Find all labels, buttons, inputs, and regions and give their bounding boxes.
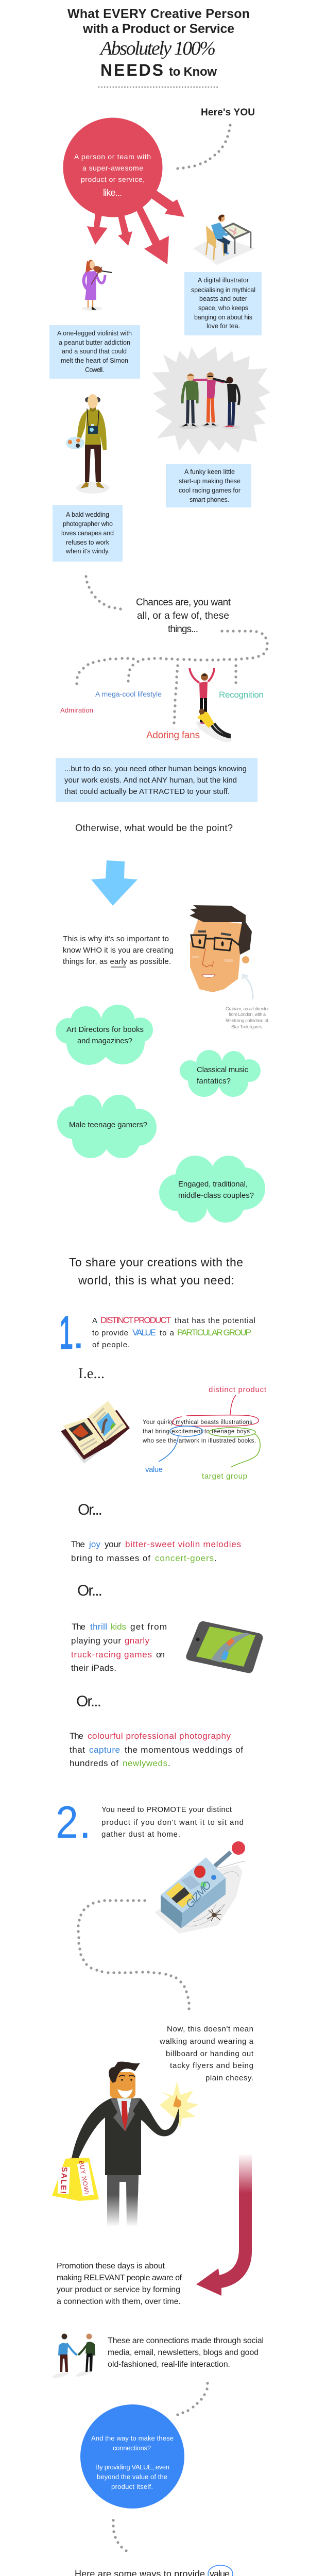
panel: illustrator caption: love for tea. [207,323,240,330]
text block: distinct product definition: that has the potential [175,1316,255,1325]
panel: photographer caption: loves canapes and [61,530,114,537]
caption: Graham: Star Trek figures. [231,1024,263,1029]
panel: start-up caption: smart phones. [190,496,229,503]
panel: blue circle: And the way to make these [91,2434,174,2442]
heading: ways to provide value [75,2565,233,2576]
cloud: classical music: Classical music [197,1065,248,1074]
text block: photography example: capture [89,1745,120,1755]
numeral: 1: . [72,1307,85,1358]
cloud: teenage gamers: Male teenage gamers? [69,1121,147,1129]
text block: connections: media, email, newsletters, blogs and good [108,2348,259,2357]
text block: violin example: . [214,1553,217,1563]
annotation: value [145,1426,203,1474]
text block: violin example [71,1539,241,1563]
heading: here's you: Here's YOU [201,107,255,118]
panel: red circle with arrows: product or service, [81,175,145,183]
title: to Know [169,65,217,79]
cloud: engaged couples: Engaged, traditional, [178,1180,248,1189]
icon: illustrator at desk [193,215,255,265]
text block: who it is for: things for, as early as possible. [63,957,171,966]
cloud: classical music [180,1050,261,1097]
numeral: 2: 2 [56,1797,78,1848]
panel: violinist caption: and a sound that could [62,348,127,355]
text block: photography example: the momentous weddings of [125,1745,243,1755]
text block: racing game example: gnarly [125,1636,149,1646]
title: NEEDS [100,61,163,79]
icon: cheesy salesman: BUY NOW! [78,2160,91,2195]
text block: photography example: hundreds of [70,1758,118,1768]
text block: distinct product definition [92,1315,255,1349]
text block: connections [108,2336,264,2369]
text block: distinct product definition: DISTINCT PRODUCT [100,1315,171,1325]
icon: wedding photographer [66,394,109,494]
text block: violin example: bitter-sweet violin melodies [125,1539,241,1549]
cloud: engaged couples [159,1156,265,1223]
text block: violin example: The [71,1539,85,1549]
text block: distinct product definition: to a [160,1329,175,1337]
text block: photography example: that [70,1745,85,1755]
text block: not cheesy: Now, this doesn't mean [167,2025,253,2033]
text block: connections: old-fashioned, real-life interaction. [108,2360,230,2369]
text block: promotion these days: Promotion these days is about [57,2262,165,2270]
label: recognition: Recognition [219,690,264,700]
text block: racing game example [71,1622,167,1673]
icon: cheesy salesman: SALE! [59,2167,68,2194]
dotted connector to ways [113,2520,126,2551]
text block: promote: You need to PROMOTE your distinct [101,1805,232,1814]
text block: chances are [136,597,231,635]
panel: start-up caption [166,464,251,507]
dotted connector from heading to circle [178,125,230,168]
panel: violinist caption: a peanut butter addiction [59,339,130,346]
text block: promote [101,1805,244,1839]
heading: to share your creations: To share your creations with the [69,1256,243,1269]
icon: cheesy salesman [52,2062,199,2231]
text block: who it is for: This is why it's so important to [63,935,169,943]
text block: not cheesy: walking around wearing a [159,2037,254,2046]
text block: distinct product definition: to provide [92,1329,128,1337]
text block: worked example with annotations: who see the artwork in illustrated books. [142,1438,256,1444]
text block: worked example with annotations [142,1385,267,1481]
text block: photography example: colourful professional photography [88,1731,231,1741]
cloud: engaged couples: middle-class couples? [178,1191,254,1200]
title [67,7,250,79]
text block: racing game example: playing your [71,1636,121,1646]
text block: promotion these days: a connection with them, over time. [57,2297,181,2306]
text block: photography example: . [168,1758,170,1768]
arrow: curved red [196,2154,252,2296]
text block: racing game example: thrill [90,1622,107,1632]
title: What EVERY Creative Person [67,7,250,21]
heading: or 1: Or... [78,1501,102,1518]
panel: violinist caption [49,325,140,379]
annotation: value: value [145,1465,163,1474]
arrow: caption pointer to Graham [243,975,253,999]
dotted connector from gizmo to salesman [78,1901,189,2009]
text block: worked example with annotations: that bring excitement to teenage boys [143,1429,250,1435]
cloud: art directors: Art Directors for books [66,1025,144,1034]
text block: not cheesy [159,2025,254,2082]
text block: chances are: things... [168,624,198,635]
panel: blue circle: connections? [113,2444,151,2452]
icon: star with adoring fan [190,668,234,746]
text block: violin example: your [105,1539,121,1549]
cloud: art directors: and magazines? [77,1037,132,1045]
panel: photographer caption: when it's windy. [65,548,110,555]
text block: racing game example: truck-racing games [71,1650,152,1659]
annotation: target group: target group [202,1472,247,1481]
text block: racing game example: kids [111,1622,126,1632]
panel: photographer caption: refuses to work [66,539,110,546]
numeral: 1: 1 [59,1307,73,1358]
text block: chances are: all, or a few of, these [137,611,229,621]
panel: illustrator caption [184,272,262,335]
icon: handshake [52,2334,94,2379]
heading: or 3: Or... [76,1693,101,1710]
panel: other human beings: ...but to do so, you need other human beings knowing [64,765,247,773]
text block: not cheesy: plain cheesy. [205,2074,253,2082]
panel: photographer caption: photographer who [63,520,113,528]
text block: who it is for: know WHO it is you are creating [63,946,174,955]
text block: distinct product definition: A [92,1316,97,1325]
heading: i.e.: I.e... [78,1366,105,1382]
heading: to share your creations: world, this is what you need: [78,1274,234,1287]
text block: distinct product definition: VALUE [132,1328,156,1337]
text block: promote: gather dust at home. [101,1830,180,1839]
text block: distinct product definition: of people. [92,1341,130,1349]
panel: illustrator caption: space, who keeps [198,304,248,312]
cloud: art directors [56,1005,153,1065]
annotation: target group [202,1428,260,1481]
text block: promotion these days: your product or service by forming [57,2285,180,2294]
icon: tablet with racing game [186,1621,263,1673]
panel: blue circle: product itself. [111,2483,153,2490]
panel: illustrator caption: A digital illustrator [198,277,249,284]
numeral: 2: . [79,1797,91,1848]
text block: racing game example: get from [130,1622,167,1632]
text block: photography example: The [70,1731,83,1741]
panel: blue circle: beyond the value of the [97,2473,167,2481]
text block: racing game example: on [156,1650,165,1659]
text block: photography example: newlyweds [123,1758,167,1768]
panel: start-up caption: cool racing games for [179,487,241,494]
cloud: classical music: fantatics? [197,1077,231,1086]
icon: dusty gizmo with spider: GIZMO [184,1879,214,1910]
text block: promote: product if you don't want it to sit and [101,1818,244,1827]
arrow: blue down [91,860,138,906]
dotted branching connector [77,631,267,723]
text block: connections: These are connections made through social [108,2336,264,2345]
annotation: distinct product [173,1385,267,1426]
text block: distinct product definition: PARTICULAR GROUP [177,1328,251,1337]
text block: photography example [70,1731,243,1768]
caption: Graham [226,1006,269,1029]
caption: Graham: 50-strong collection of [226,1018,268,1023]
text block: racing game example: their iPads. [71,1663,116,1673]
panel: violinist caption: A one-legged violinist with [57,330,132,337]
text block: violin example: bring to masses of [71,1553,150,1563]
text block: violin example: concert-goers [155,1553,214,1563]
panel: photographer caption [53,505,123,562]
panel: start-up caption: start-up making these [179,478,241,485]
panel: photographer caption: A bald wedding [66,511,109,518]
label: a mega-cool lifestyle: A mega-cool lifestyle [95,690,162,698]
icon: open book [60,1401,131,1464]
heading: or 2: Or... [77,1582,102,1599]
panel: other human beings: your work exists. And not ANY human, but the kind [64,776,237,785]
panel: blue circle [80,2404,184,2509]
text block: violin example: joy [89,1539,101,1549]
text block: racing game example: The [72,1622,85,1632]
dotted connector to chances text [86,577,121,609]
heading: otherwise: Otherwise, what would be the point? [75,822,233,833]
cloud: teenage gamers [57,1095,157,1158]
panel: other human beings: that could actually be ATTRACTED to your stuff. [64,787,230,796]
panel: other human beings [56,758,258,802]
title: Absolutely 100% [99,38,216,59]
text block: promotion these days [57,2262,182,2306]
icon: violinist [82,260,112,311]
title: with a Product or Service [82,22,234,36]
text block: chances are: Chances are, you want [136,597,231,608]
annotation: distinct product: distinct product [209,1385,267,1394]
text block: not cheesy: billboard or handing out [166,2049,254,2058]
label: admiration: Admiration [60,706,93,714]
panel: illustrator caption: beasts and outer [199,295,247,302]
text block: not cheesy: tacky flyers and being [170,2061,253,2070]
icon: dusty gizmo with spider [154,1841,245,1934]
panel: red circle with arrows: A person or team with [74,152,151,161]
panel: blue circle: By providing VALUE, even [95,2463,169,2471]
panel: start-up caption: A funky keen little [184,468,235,476]
panel: illustrator caption: banging on about his [194,314,252,321]
icon: grey starburst with three start-up founders [152,347,270,455]
caption: Graham: Graham, an art director [226,1006,269,1011]
panel: red circle with arrows: like... [103,188,122,198]
panel: violinist caption: Cowell. [85,366,104,374]
text block: who it is for [63,935,174,967]
dotted connector to blue circle [178,2383,208,2415]
panel: violinist caption: melt the heart of Simon [61,357,128,364]
panel: illustrator caption: specialising in mythical [191,286,255,294]
heading: to share your creations [69,1256,243,1287]
caption: Graham: from London, with a [229,1012,266,1017]
label: adoring fans: Adoring fans [146,730,200,741]
text block: worked example with annotations: Your quirky mythical beasts illustrations [143,1419,252,1426]
icon: Graham face [190,905,252,992]
panel: red circle with arrows [63,117,184,264]
panel: red circle with arrows: a super-awesome [82,164,143,172]
text block: promotion these days: making RELEVANT people aware of [57,2274,182,2282]
